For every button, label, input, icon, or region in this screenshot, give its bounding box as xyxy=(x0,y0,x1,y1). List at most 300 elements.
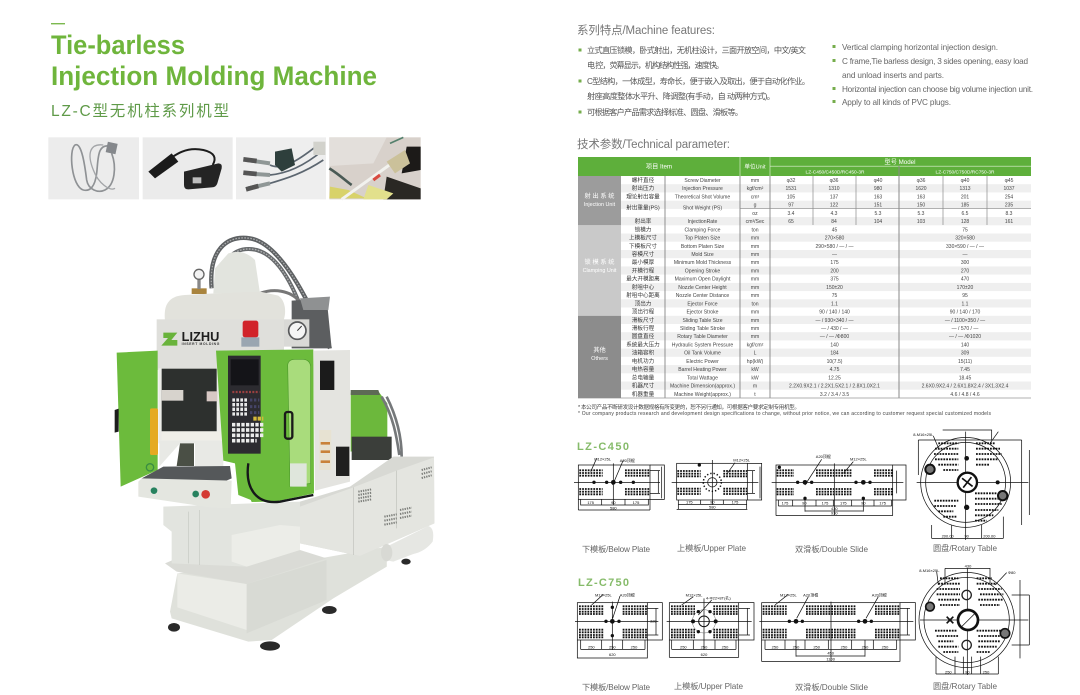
units column: mm xyxy=(751,252,759,258)
item names in English: InjectionRate xyxy=(688,219,718,225)
drawing: C450 upper plate: 90 xyxy=(710,500,715,505)
category: injection unit: Injection Unit xyxy=(584,202,616,208)
LZ-C750 values: φ40 xyxy=(961,178,970,184)
LZ-C750 values: 470 xyxy=(961,277,969,283)
LZ-C450 values: 3.4 xyxy=(788,211,795,217)
drawing: C750 rotary table: 430 xyxy=(965,563,972,568)
units column: cm³/Sec xyxy=(746,219,765,225)
clamp cabinet xyxy=(300,457,434,556)
LZ-C450 values: 184 xyxy=(830,351,839,357)
LZ-C750 drawing captions: 双滑板/Double Slide xyxy=(795,682,868,692)
item names in Chinese: 最大开模距离 xyxy=(626,275,660,283)
drawing: C750 double slide: 250 xyxy=(862,645,869,650)
drawing: C450 double slide: 90 xyxy=(861,501,866,506)
LZ-C750 values: 4.6 / 4.8 / 4.6 xyxy=(950,392,980,398)
drawing: C450 upper plate: M12×25L xyxy=(733,457,751,462)
units column: mm xyxy=(751,310,759,316)
item names in English: Electric Power xyxy=(686,359,719,365)
LZ-C450 values: 151 xyxy=(874,203,882,209)
drawing: C750 upper plate: 250 xyxy=(722,645,729,650)
LZ-C450 values: 163 xyxy=(874,194,882,200)
control panel with keypad xyxy=(228,356,263,454)
drawing: C450 upper plate: 175 xyxy=(686,500,693,505)
logo face panel: INSERT MOLDING xyxy=(182,342,220,346)
item names in English: Nozzle Center Height xyxy=(678,285,727,291)
LZ-C750 values: — / 1100×350 / — xyxy=(945,318,985,324)
LZ-C750 drawing captions: 上模板/Upper Plate xyxy=(674,681,743,691)
drawing: C750 double slide: 250 xyxy=(882,645,889,650)
drawing: C750 upper plate: 250 xyxy=(680,645,687,650)
LZ-C750 values: 161 xyxy=(1005,219,1013,225)
features list: Chinese: 电 控，荧幕显示，机构结构性强，速度快。 xyxy=(587,60,724,70)
LZ-C750 values: 185 xyxy=(961,203,969,209)
item names in English: Barrel Heating Power xyxy=(678,367,727,373)
LZ-C450 values: — / 430 / — xyxy=(821,326,848,332)
title block: Injection Molding Machine xyxy=(51,61,377,91)
item names in English: Ejector Force xyxy=(687,301,718,307)
item names in English: Theoretical Shot Volume xyxy=(675,194,730,200)
item names in Chinese: 顶出行程 xyxy=(632,308,655,316)
drawing: C450 double slide: 930 xyxy=(831,511,838,516)
item names in English: Mold Size xyxy=(691,252,714,258)
units column: kgf/cm² xyxy=(747,342,764,348)
units column: mm xyxy=(751,326,759,332)
drawing: C450 rotary table: 200.00 xyxy=(983,534,996,539)
drawing: C750 double slide: A20顶棍 xyxy=(803,592,818,598)
item names in English: Clamping Force xyxy=(685,227,721,233)
LZ-C750 values: 140 xyxy=(961,342,969,348)
category: clamping unit xyxy=(578,225,621,316)
item names in English: Nozzle Center Distance xyxy=(676,293,729,299)
drawing: C750 double slide: 450 xyxy=(827,651,835,656)
drawing: C450 double slide: 175 xyxy=(782,501,789,506)
features list: English: Apply to all kinds of PVC plugs. xyxy=(842,98,951,107)
features list: Chinese: 可根据客户产品需求选择标准、圆盘、滑板等。 xyxy=(587,107,743,117)
item names in English: Shot Weight (PS) xyxy=(683,206,722,212)
LZ-C750 values: 150 xyxy=(917,203,925,209)
item names in Chinese: 理论射出容量 xyxy=(626,192,660,200)
units column: m xyxy=(753,384,757,390)
features list: Chinese: 立式直压锁模，卧式射出，无机柱设计，三面开放空间，中文/英文 xyxy=(587,45,806,55)
table header: LZ-C750/C750D/RC750-3R xyxy=(936,170,995,176)
LZ-C750 values: 320×580 xyxy=(955,236,975,242)
drawing: C750 rotary table: Φ80 xyxy=(1008,570,1016,575)
drawing: C450 below plate: M12×25L xyxy=(594,457,612,462)
units column: kW xyxy=(751,367,759,373)
LZ-C450 values: 375 xyxy=(830,277,839,283)
LZ-C750 values: 15(11) xyxy=(958,359,972,365)
item names in English: Top Platen Size xyxy=(685,236,720,242)
units column: ton xyxy=(751,227,759,233)
LZ-C750 values: 2.6X0.9X2.4 / 2.6X1.8X2.4 / 3X1.3X2.4 xyxy=(922,384,1009,390)
LZ-C750 values: 201 xyxy=(961,194,969,200)
table footnote: * Our company products research and development design specifications to change, without prior notice, we can according to customer request special customized models xyxy=(578,411,992,417)
drawing: C750 double slide: M12×25L xyxy=(780,593,797,598)
features list: English: C frame,Tie barless design, 3 sides opening, easy load xyxy=(842,57,1028,66)
machine illustration xyxy=(115,238,434,651)
LZ-C450 drawing captions: 下模板/Below Plate xyxy=(582,544,650,554)
yellow safety light curtain xyxy=(146,408,158,471)
mold window xyxy=(158,368,223,470)
item names in English: Oil Tank Volume xyxy=(684,351,721,357)
LZ-C750 values: 6.5 xyxy=(962,211,969,217)
LZ-C750 technical drawings xyxy=(575,563,1029,675)
LZ-C450 heading: LZ-C450 xyxy=(577,441,629,453)
LZ-C450 values: 45 xyxy=(832,227,837,233)
drawing: C750 rotary table: 250 xyxy=(983,669,990,674)
item names in Chinese: 下模板尺寸 xyxy=(629,242,657,250)
item names in Chinese: 顶出力 xyxy=(635,299,652,307)
side electric panel xyxy=(313,350,350,491)
units column: hp(kW) xyxy=(747,359,764,365)
hydraulic hoses xyxy=(211,238,330,348)
features section heading: 系列特点/Machine features: xyxy=(577,23,715,37)
LZ-C450 values: 150±20 xyxy=(826,285,843,291)
drawing: C750 upper plate: 620 xyxy=(701,652,708,657)
drawing: C450 double slide: 90 xyxy=(802,501,807,506)
LZ-C750 values: 1620 xyxy=(915,186,927,192)
drawing: C750 rotary table xyxy=(919,563,1029,675)
units column: mm xyxy=(751,260,759,266)
item names in Chinese: 圆盘直径 xyxy=(632,332,655,340)
drawing: C750 below plate xyxy=(575,592,662,658)
item names in English: Bottom Platen Size xyxy=(681,244,724,250)
category: others: 其他 xyxy=(593,346,606,354)
drawing: C450 upper plate: 580 xyxy=(709,505,716,510)
features list: Chinese xyxy=(578,45,810,117)
LZ-C450 values: 10(7.5) xyxy=(827,359,843,365)
LZ-C750 values: 163 xyxy=(917,194,925,200)
product photos: cables xyxy=(48,137,421,199)
left safety door xyxy=(115,351,158,487)
drawing: C450 below plate: 90 xyxy=(611,500,616,505)
units column: mm xyxy=(751,236,759,242)
LZ-C450 values: 137 xyxy=(830,194,838,200)
LZ-C450 values: 3.2 / 3.4 / 3.5 xyxy=(820,392,849,398)
item names in English: Minimum Mold Thickness xyxy=(674,260,732,266)
LZ-C750 values: 235 xyxy=(1005,203,1013,209)
LZ-C450 drawing captions: 圆盘/Rotary Table xyxy=(933,543,997,553)
table header: 项目 Item xyxy=(646,164,672,170)
LZ-C450 values: — / 930×340 / — xyxy=(816,318,853,324)
units column: ton xyxy=(751,301,759,307)
drawing: C450 upper plate xyxy=(672,457,762,510)
LZ-C750 values: 170±20 xyxy=(957,285,974,291)
units column: kW xyxy=(751,375,759,381)
drawing: C450 double slide: A20顶棍 xyxy=(816,453,831,459)
LZ-C450 values: 12.25 xyxy=(828,375,841,381)
item names in Chinese: 容模尺寸 xyxy=(632,250,655,258)
drawing: C450 double slide: 175 xyxy=(879,501,887,506)
drawing: C750 below plate: 320 xyxy=(650,619,657,624)
units column: mm xyxy=(751,334,759,340)
drawing: C750 upper plate: 250 xyxy=(701,645,708,650)
LZ-C750 values: 300 xyxy=(961,260,969,266)
machine feet xyxy=(168,559,411,651)
LZ-C450 values: 200 xyxy=(830,268,839,274)
drawing: C450 double slide: 430 xyxy=(831,506,838,511)
drawing: C750 rotary table: 8-M16×25L xyxy=(919,568,940,573)
drawing: C750 below plate: 250 xyxy=(609,645,616,650)
LZ-C450 drawing captions xyxy=(582,543,997,554)
drawing: C750 below plate: M12×25L xyxy=(595,593,612,598)
LZ-C450 values: 104 xyxy=(874,219,882,225)
LZ-C750 values: 1313 xyxy=(959,186,971,192)
LZ-C750 values: 75 xyxy=(962,227,968,233)
LZ-C450 values: 175 xyxy=(830,260,839,266)
drawing: C750 upper plate: M12×25L xyxy=(686,593,703,598)
drawing: C750 double slide: 250 xyxy=(813,645,821,650)
LZ-C750 values: φ45 xyxy=(1005,178,1014,184)
units column: mm xyxy=(751,268,759,274)
LZ-C750 values: — xyxy=(962,252,968,258)
LZ-C750 values: 1.1 xyxy=(962,301,969,307)
title block xyxy=(51,23,377,120)
LZ-C450 values: 105 xyxy=(787,194,795,200)
LZ-C450 values: 97 xyxy=(788,203,794,209)
LZ-C750 values: 309 xyxy=(961,351,969,357)
features list: English xyxy=(832,43,1033,107)
photo: black display adapter xyxy=(143,137,233,199)
units column: mm xyxy=(751,285,759,291)
LZ-C750 values: 5.3 xyxy=(918,211,925,217)
logo face panel: LIZHU xyxy=(182,330,219,344)
drawing: C750 below plate: 250 xyxy=(588,645,595,650)
units column: mm xyxy=(751,244,759,250)
table header xyxy=(578,157,1031,176)
drawing: C450 double slide: M12×25L xyxy=(850,457,867,462)
item names in Chinese: 射咀中心 xyxy=(632,283,655,291)
item names in Chinese: 机器尺寸 xyxy=(632,382,655,390)
technical parameter heading: 技术参数/Technical parameter: xyxy=(577,137,730,151)
drawing: C750 double slide xyxy=(759,592,915,662)
drawing: C450 rotary table xyxy=(913,430,1029,540)
LZ-C450 values: 1310 xyxy=(828,186,840,192)
LZ-C750 values: 254 xyxy=(1005,194,1013,200)
drawing: C450 double slide: 175 xyxy=(840,501,847,506)
drawing: C750 rotary table: 250 xyxy=(945,669,952,674)
drawing: C750 double slide: 250 xyxy=(841,645,848,650)
drawing: C450 double slide: 175 xyxy=(822,501,829,506)
LZ-C750 heading: LZ-C750 xyxy=(578,577,629,589)
LZ-C450 values: 140 xyxy=(830,342,839,348)
drawing: C450 rotary table: 200.00 xyxy=(942,534,955,539)
item names in English: Sliding Table Size xyxy=(682,318,723,324)
item names in English: Injection Pressure xyxy=(682,186,723,192)
drawing: C750 upper plate xyxy=(667,593,754,657)
LZ-C450 values: 980 xyxy=(874,186,882,192)
units column xyxy=(746,178,765,398)
row stripes and rules xyxy=(578,166,1031,398)
injection unit green housing and hoses xyxy=(351,390,402,460)
machine base plinth xyxy=(165,547,387,642)
item names in Chinese: 油箱容积 xyxy=(632,349,655,357)
photo: network cables xyxy=(329,137,421,199)
LZ-C750 drawing captions: 下模板/Below Plate xyxy=(582,682,650,692)
drawing: C750 rotary table: 90 xyxy=(965,669,970,674)
drawing: C750 below plate: 620 xyxy=(609,652,616,657)
item names in Chinese: 机器重量 xyxy=(632,390,655,398)
drawing: C750 below plate: 250 xyxy=(631,645,638,650)
LZ-C450 values: — xyxy=(832,252,837,258)
units column: kgf/cm² xyxy=(747,186,764,192)
oil pump motor xyxy=(381,526,433,562)
table footnote: * 本公司产品不断研发设计数据规格有所变更的，恕不另行通知，可根据客户要求定制专用机型。 xyxy=(578,403,800,411)
drawing: C450 rotary table: 90 xyxy=(964,534,970,539)
item names in English: Total Wattage xyxy=(687,375,718,381)
LZ-C450 values: 75 xyxy=(832,293,837,299)
item names in English: Rotary Table Diameter xyxy=(677,334,728,340)
item names in Chinese: 上模板尺寸 xyxy=(629,234,657,242)
category: clamping unit: 锁 模 系 统 xyxy=(585,258,614,266)
category: others xyxy=(578,316,621,398)
LZ-C750 values: — / — /Φ1020 xyxy=(949,334,981,340)
features list: English: and unload inserts and parts. xyxy=(842,71,944,80)
units column: oz xyxy=(752,211,758,217)
item names in English: Machine Dimension(approx.) xyxy=(670,384,735,390)
top cap housing xyxy=(165,292,285,321)
LZ-C450 values: 90 / 140 / 140 xyxy=(819,310,850,316)
LZ-C450 values: 5.3 xyxy=(875,211,882,217)
LZ-C450 values xyxy=(785,178,883,398)
drawing: C450 upper plate: 175 xyxy=(732,500,739,505)
photo: connectors and plug xyxy=(236,137,326,199)
green control cabinet door xyxy=(216,349,314,502)
drawing: C750 double slide: 1100 xyxy=(826,657,836,662)
units column: mm xyxy=(751,178,759,184)
units column: L xyxy=(754,351,757,357)
LZ-C450 values: 290×580 / — / — xyxy=(816,244,853,250)
drawing: C450 below plate xyxy=(574,457,664,510)
drawing: C450 below plate: 175 xyxy=(587,500,595,505)
item names in English: Opening Stroke xyxy=(685,268,720,274)
LZ-C750 values: 1037 xyxy=(1003,186,1015,192)
valve block and gauge right xyxy=(283,297,332,348)
technical parameter table xyxy=(578,157,1031,398)
item names in Chinese: 滑板行程 xyxy=(632,324,655,332)
LZ-C450 values: φ32 xyxy=(787,178,796,184)
category: injection unit xyxy=(578,176,621,225)
LZ-C750 values: 103 xyxy=(917,219,925,225)
features list: Chinese: C型结构，一体成型，寿命长，便于嵌入及取出，便于自动化作业。 xyxy=(587,76,810,86)
LZ-C750 values: φ36 xyxy=(917,178,926,184)
units column: mm xyxy=(751,277,759,283)
item names in English: Ejector Stroke xyxy=(686,310,719,316)
LZ-C450 values: 1531 xyxy=(785,186,797,192)
units column: mm xyxy=(751,318,759,324)
category: clamping unit: Clamping Unit xyxy=(583,268,617,274)
drawing: C750 double slide: 250 xyxy=(772,645,779,650)
features list: English: Vertical clamping horizontal injection design. xyxy=(842,43,998,52)
item names in Chinese: 射出压力 xyxy=(632,184,655,192)
item names in English: Sliding Table Stroke xyxy=(680,326,725,332)
LZ-C750 values: 7.45 xyxy=(960,367,970,373)
item names in Chinese: 系统最大压力 xyxy=(626,340,660,348)
item names in Chinese: 总电输量 xyxy=(632,373,655,381)
LZ-C450 values: φ36 xyxy=(830,178,839,184)
LZ-C750 values: 90 / 140 / 170 xyxy=(950,310,981,316)
LZ-C450 values: 2.2X0.9X2.1 / 2.2X1.5X2.1 / 2.8X1.0X2.1 xyxy=(789,384,880,390)
LZ-C450 values: 1.1 xyxy=(831,301,838,307)
title block: LZ-C型无机柱系列机型 xyxy=(51,102,229,120)
LZ-C750 values: 270 xyxy=(961,268,969,274)
table header: LZ-C450/C450D/RC450-3R xyxy=(806,170,865,176)
LZ-C750 values xyxy=(915,178,1015,398)
LZ-C750 values: 95 xyxy=(962,293,968,299)
units column: cm³ xyxy=(751,194,760,200)
drawing: C750 double slide: 250 xyxy=(793,645,800,650)
drawing: C750 upper plate: 4-Φ22×8T(孔) xyxy=(706,594,731,600)
item names in Chinese: 最小模厚 xyxy=(632,258,655,266)
LZ-C450 values: — / — /Φ800 xyxy=(820,334,849,340)
LZ-C750 drawing captions xyxy=(582,681,997,692)
item names in Chinese: 电机功力 xyxy=(632,357,655,365)
LZ-C450 values: 270×580 xyxy=(825,236,845,242)
units column: mm xyxy=(751,293,759,299)
LZ-C750 values: 8.3 xyxy=(1006,211,1013,217)
item names in Chinese: 射出率 xyxy=(635,217,652,225)
drawing: C450 double slide xyxy=(772,453,906,516)
drawing: C450 below plate: 580 xyxy=(610,505,617,510)
item names in English: Screw Diameter xyxy=(684,178,721,184)
injection cylinder top xyxy=(213,252,260,293)
table header: 型号 Model xyxy=(885,158,915,166)
LZ-C450 values: 122 xyxy=(830,203,838,209)
drawing: C450 below plate: A20顶棍 xyxy=(620,457,635,463)
drawing: C450 below plate: 175 xyxy=(633,500,640,505)
item names in Chinese: 滑板尺寸 xyxy=(632,316,655,324)
drawing: C450 rotary table: 8-M16×25L xyxy=(913,432,934,437)
pressure gauge left xyxy=(192,269,207,294)
machine lower column xyxy=(163,502,300,567)
title block: Tie-barless xyxy=(51,30,185,60)
features list: English: Horizontal injection can choose big volume injection unit. xyxy=(842,85,1033,94)
item names in English: Machine Weight(approx.) xyxy=(674,392,731,398)
LZ-C450 values: 4.3 xyxy=(831,211,838,217)
LZ-C750 values: — / 570 / — xyxy=(952,326,978,332)
LZ-C450 drawing captions: 双滑板/Double Slide xyxy=(795,544,868,554)
red warning lamp xyxy=(241,321,259,347)
LZ-C450 values: φ40 xyxy=(874,178,883,184)
item names in Chinese xyxy=(626,176,660,398)
LZ-C750 values: 18.45 xyxy=(959,375,971,381)
operator table and buttons xyxy=(138,466,232,508)
LZ-C450 drawing captions: 上模板/Upper Plate xyxy=(677,543,746,553)
item names in Chinese: 射出重量(PS) xyxy=(626,204,660,212)
features list: Chinese: 射座高度整体水平升、降调整(有手动，自 动两种方式)。 xyxy=(587,91,775,101)
units column: t xyxy=(754,392,756,398)
LZ-C450 technical drawings xyxy=(574,430,1029,540)
drawing: C750 double slide: A20顶棍 xyxy=(872,592,887,598)
table footnote xyxy=(578,403,992,417)
item names in Chinese: 螺杆直径 xyxy=(632,176,655,184)
LZ-C450 values: 65 xyxy=(788,219,794,225)
item names in Chinese: 开模行程 xyxy=(632,266,655,274)
LZ-C750 values: 330×590 / — / — xyxy=(946,244,984,250)
item names in English xyxy=(670,178,735,398)
photo: coiled grey cable xyxy=(48,137,139,199)
item names in Chinese: 锁模力 xyxy=(635,225,652,233)
item names in Chinese: 射咀中心距离 xyxy=(626,291,660,299)
drawing: C750 below plate: A20顶棍 xyxy=(620,592,635,598)
LZ-C750 drawing captions: 圆盘/Rotary Table xyxy=(933,681,997,691)
LZ-C450 values: 84 xyxy=(831,219,837,225)
logo face panel xyxy=(157,319,284,370)
item names in Chinese: 电热容量 xyxy=(632,365,655,373)
category: injection unit: 射 出 系 统 xyxy=(585,192,614,200)
table header: 单位Unit xyxy=(744,162,766,170)
item names in English: Maximum Open Daylight xyxy=(675,277,731,283)
